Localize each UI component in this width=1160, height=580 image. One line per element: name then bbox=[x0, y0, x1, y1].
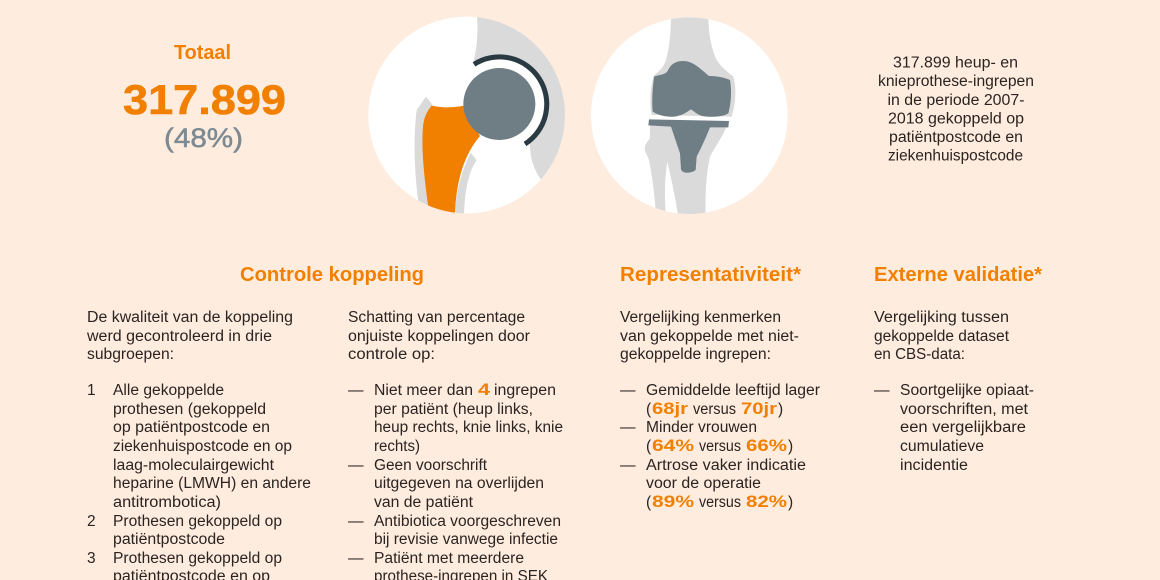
text block: representativiteit: 68jr bbox=[652, 399, 688, 418]
icon: knee prosthesis bbox=[591, 15, 788, 217]
text block: externe validatie bbox=[874, 309, 1034, 474]
total statistic: (48%) bbox=[164, 123, 243, 153]
text block: koppeling subgroepen: werd gecontroleerd in drie bbox=[86, 328, 272, 345]
text block: schatting onjuiste koppelingen: — bbox=[348, 550, 364, 567]
text block: schatting onjuiste koppelingen: — bbox=[348, 457, 364, 474]
text block: koppeling subgroepen: subgroepen: bbox=[87, 346, 174, 363]
icon: hip prosthesis bbox=[368, 10, 573, 215]
text block: koppeling subgroepen: 1 bbox=[87, 382, 96, 399]
text block: representativiteit: 70jr bbox=[741, 399, 777, 418]
text block: representativiteit: ( bbox=[646, 401, 652, 418]
heading: Representativiteit: Representativiteit* bbox=[620, 264, 801, 286]
text block: data description: 317.899 heup- en bbox=[893, 54, 1018, 72]
text block: representativiteit: Gemiddelde leeftijd lager bbox=[646, 382, 820, 399]
text block: schatting onjuiste koppelingen: van de patiënt bbox=[374, 494, 474, 511]
text block: data description bbox=[878, 54, 1034, 164]
text block: schatting onjuiste koppelingen: onjuiste koppelingen door bbox=[348, 328, 530, 345]
text block: representativiteit: van gekoppelde met niet- bbox=[620, 328, 799, 345]
text block: koppeling subgroepen bbox=[86, 309, 311, 580]
text block: externe validatie: en CBS-data: bbox=[874, 346, 965, 363]
text block: koppeling subgroepen: ziekenhuispostcode en op bbox=[113, 438, 292, 455]
text block: koppeling subgroepen: 2 bbox=[87, 513, 96, 530]
text block: representativiteit: versus bbox=[693, 401, 736, 418]
text block: data description: ziekenhuispostcode bbox=[888, 148, 1023, 164]
text block: representativiteit: voor de operatie bbox=[646, 475, 761, 492]
text block: representativiteit: Artrose vaker indicatie bbox=[646, 457, 806, 474]
total statistic: Totaal bbox=[174, 42, 231, 64]
text block: koppeling subgroepen: De kwaliteit van de koppeling bbox=[87, 309, 293, 326]
text block: schatting onjuiste koppelingen: — bbox=[348, 382, 364, 399]
text block: koppeling subgroepen: patiëntpostcode bbox=[113, 531, 225, 548]
text block: externe validatie: cumulatieve bbox=[900, 438, 984, 455]
text block: data description: 2018 gekoppeld op bbox=[888, 110, 1024, 128]
text block: representativiteit: ) bbox=[788, 494, 793, 511]
text block: schatting onjuiste koppelingen: 4 bbox=[478, 380, 491, 399]
text block: representativiteit: ( bbox=[646, 438, 652, 455]
heading: Controle koppeling: Controle koppeling bbox=[240, 264, 424, 286]
text block: representativiteit: 66% bbox=[746, 436, 787, 455]
text block: representativiteit: — bbox=[620, 419, 636, 436]
text block: schatting onjuiste koppelingen: Patiënt met meerdere bbox=[374, 550, 524, 567]
text block: schatting onjuiste koppelingen bbox=[348, 309, 563, 580]
text block: schatting onjuiste koppelingen: Niet meer dan bbox=[374, 382, 473, 399]
text block: data description: patiëntpostcode en bbox=[889, 129, 1023, 146]
text block: koppeling subgroepen: Prothesen gekoppeld op bbox=[113, 513, 282, 530]
text block: data description: knieprothese-ingrepen bbox=[878, 73, 1034, 90]
text block: externe validatie: incidentie bbox=[900, 457, 968, 474]
text block: koppeling subgroepen: 3 bbox=[87, 550, 96, 567]
text block: representativiteit: Minder vrouwen bbox=[646, 419, 757, 436]
text block: representativiteit: 89% bbox=[652, 492, 694, 511]
text block: schatting onjuiste koppelingen: Antibiotica voorgeschreven bbox=[374, 513, 561, 530]
text block: schatting onjuiste koppelingen: ingrepen bbox=[494, 382, 556, 399]
text block: data description: in de periode 2007- bbox=[888, 92, 1024, 109]
text block: koppeling subgroepen: antitrombotica) bbox=[113, 494, 221, 511]
text block: schatting onjuiste koppelingen: bij revisie vanwege infectie bbox=[374, 531, 558, 548]
text block: koppeling subgroepen: laag-moleculairgewicht bbox=[113, 457, 275, 474]
text block: representativiteit: versus bbox=[699, 438, 741, 455]
text block: representativiteit: — bbox=[620, 457, 636, 474]
text block: externe validatie: Vergelijking tussen bbox=[874, 309, 1009, 326]
text block: representativiteit: ) bbox=[788, 438, 793, 455]
text block: representativiteit: 64% bbox=[652, 436, 694, 455]
text block: externe validatie: — bbox=[874, 382, 890, 399]
text block: representativiteit: ( bbox=[646, 494, 652, 511]
text block: externe validatie: voorschriften, met bbox=[900, 401, 1029, 418]
text block: representativiteit: — bbox=[620, 382, 636, 399]
text block: schatting onjuiste koppelingen: controle op: bbox=[348, 346, 435, 363]
text block: schatting onjuiste koppelingen: rechts) bbox=[374, 438, 420, 455]
text block: representativiteit: Vergelijking kenmerken bbox=[620, 309, 781, 326]
total statistic bbox=[123, 42, 286, 153]
text block: schatting onjuiste koppelingen: Geen voorschrift bbox=[374, 457, 488, 474]
total statistic: 317.899 bbox=[123, 76, 286, 123]
text block: representativiteit: versus bbox=[699, 494, 741, 511]
text block: koppeling subgroepen: prothesen (gekoppeld bbox=[113, 401, 266, 418]
text block: representativiteit: gekoppelde ingrepen: bbox=[620, 346, 771, 363]
text block: representativiteit bbox=[620, 309, 820, 511]
text block: schatting onjuiste koppelingen: — bbox=[348, 513, 364, 530]
text block: schatting onjuiste koppelingen: heup rechts, knie links, knie bbox=[374, 419, 563, 436]
text block: koppeling subgroepen: Prothesen gekoppeld op bbox=[113, 550, 282, 567]
text block: koppeling subgroepen: op patiëntpostcode en bbox=[113, 419, 270, 436]
text block: schatting onjuiste koppelingen: uitgegeven na overlijden bbox=[374, 475, 544, 492]
heading: Externe validatie: Externe validatie* bbox=[874, 264, 1042, 286]
text block: externe validatie: gekoppelde dataset bbox=[874, 328, 1010, 345]
text block: koppeling subgroepen: Alle gekoppelde bbox=[113, 382, 224, 399]
text block: schatting onjuiste koppelingen: per patiënt (heup links, bbox=[374, 401, 533, 418]
text block: representativiteit: 82% bbox=[746, 492, 787, 511]
text block: externe validatie: een vergelijkbare bbox=[900, 419, 1026, 436]
text block: schatting onjuiste koppelingen: Schatting van percentage bbox=[348, 309, 525, 326]
text block: koppeling subgroepen: heparine (LMWH) en andere bbox=[113, 475, 311, 492]
text block: externe validatie: Soortgelijke opiaat- bbox=[900, 382, 1034, 399]
text block: representativiteit: ) bbox=[778, 401, 783, 418]
